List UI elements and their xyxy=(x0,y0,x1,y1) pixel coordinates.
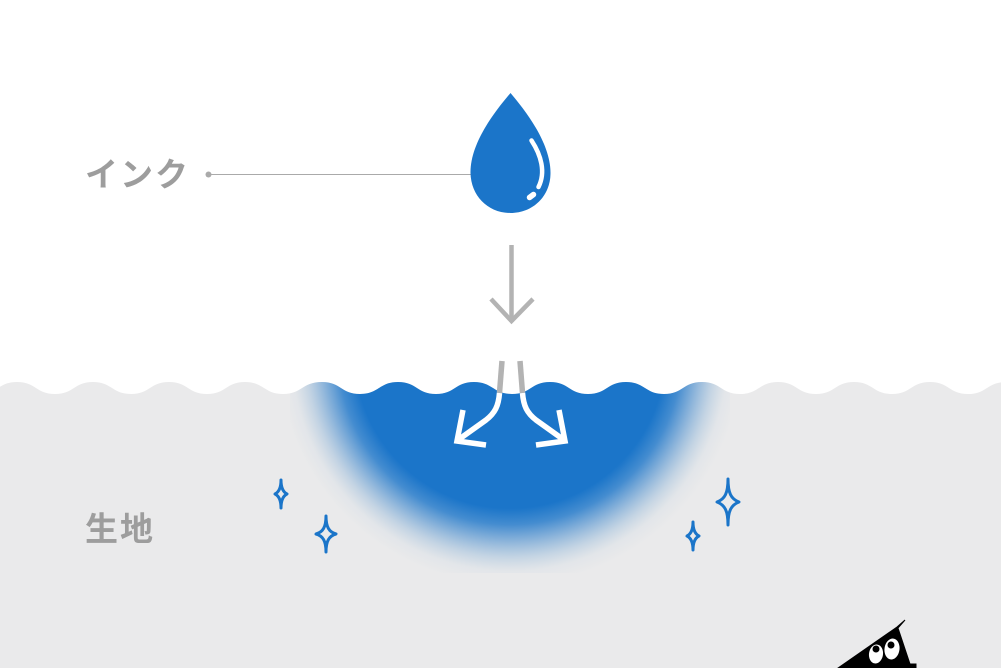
arrow: spreading left xyxy=(457,361,502,445)
label: fabric: 生地 xyxy=(85,510,155,548)
arrow: down xyxy=(491,245,533,322)
sparkles xyxy=(275,479,739,552)
ink spreading in fabric xyxy=(290,370,730,573)
sparkle 1 xyxy=(275,480,287,508)
sparkle 4 xyxy=(687,522,699,550)
sparkle 3 xyxy=(717,479,739,525)
leader line from label to drop xyxy=(206,172,472,178)
fabric with wavy surface xyxy=(0,370,1001,668)
arrow: spreading right xyxy=(520,361,565,445)
mascot: black triangle with eyes xyxy=(838,620,916,668)
sparkle 2 xyxy=(316,516,336,552)
label: ink: インク xyxy=(85,156,190,193)
icon: ink drop xyxy=(470,93,550,213)
